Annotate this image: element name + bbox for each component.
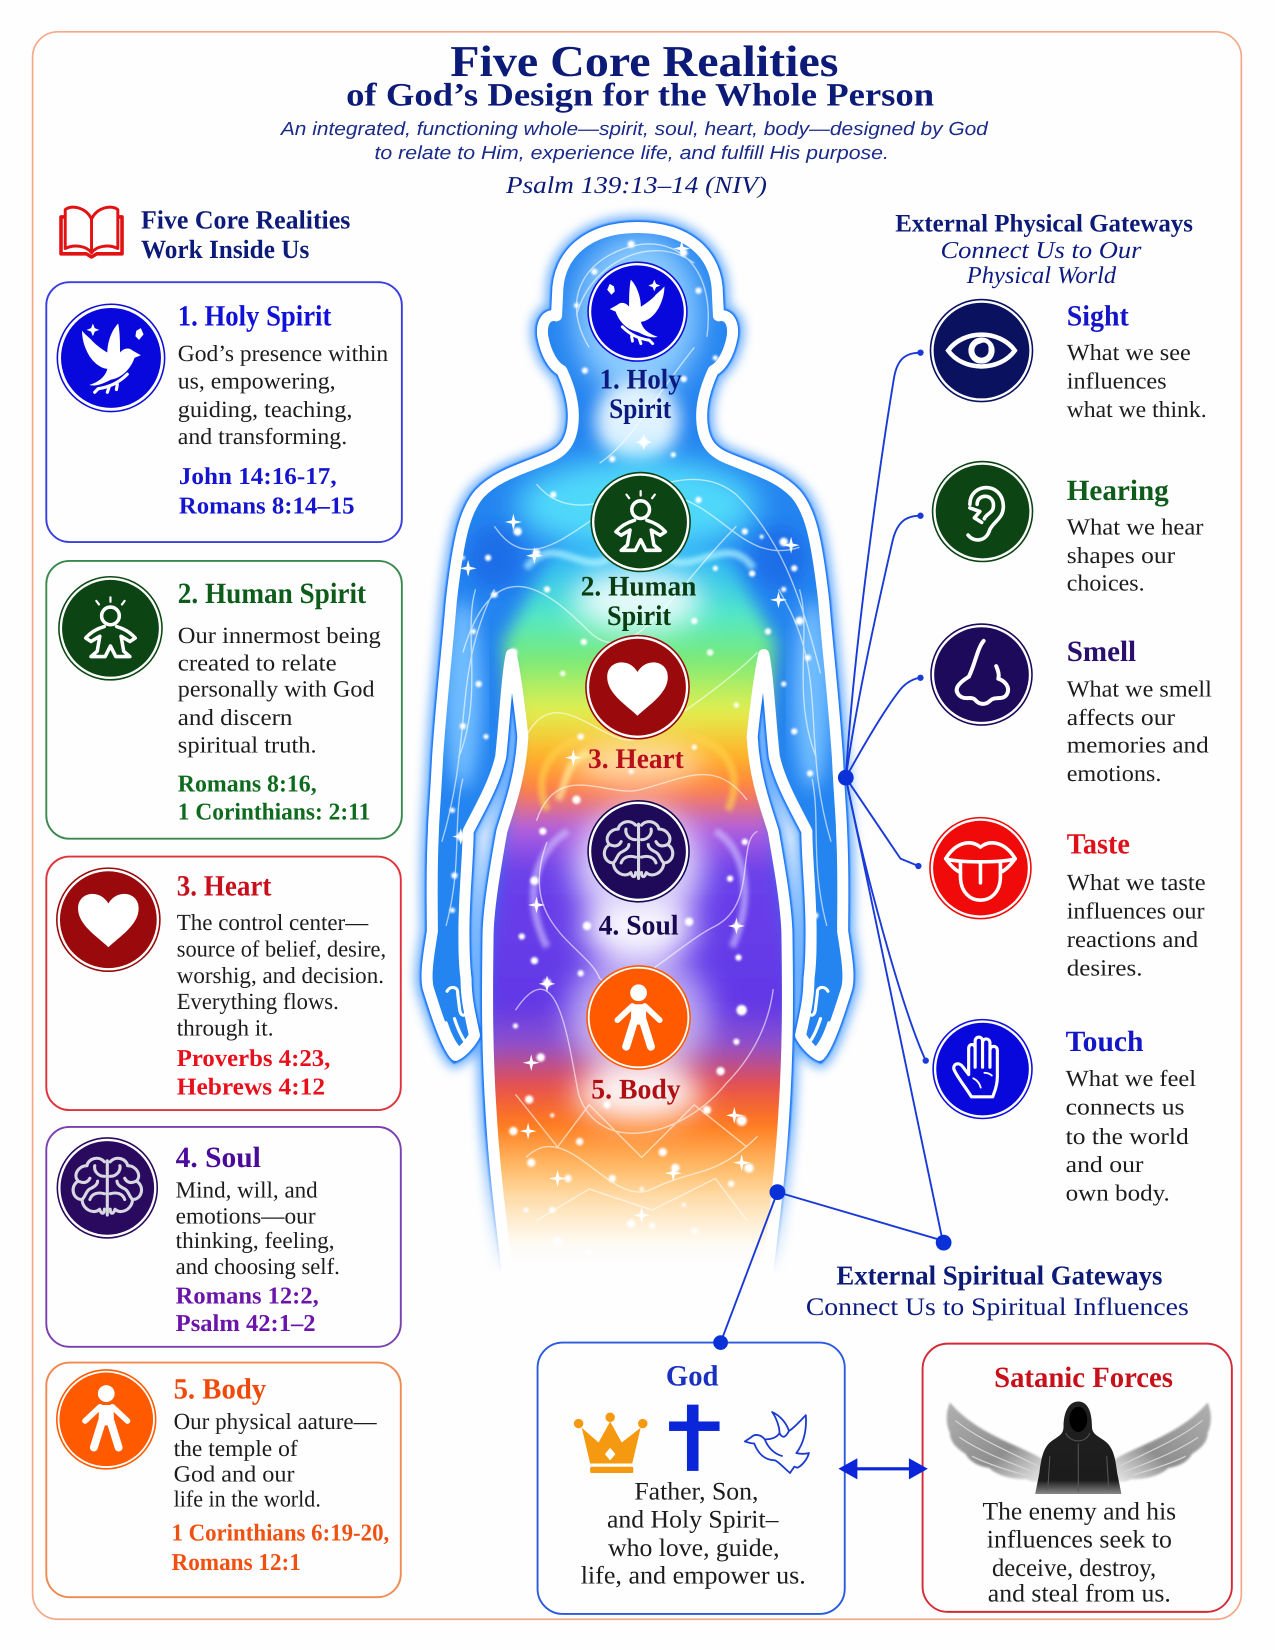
- label: Spirit: [609, 393, 671, 424]
- heading: Taste: [1067, 828, 1130, 861]
- subtitle: [280, 118, 989, 163]
- description: connects us: [1066, 1093, 1185, 1120]
- heading: 1. Holy Spirit: [178, 300, 332, 333]
- description: spiritual truth.: [178, 731, 317, 758]
- description: The enemy and his: [983, 1498, 1176, 1526]
- scripture references: [179, 463, 355, 519]
- description: influences our: [1067, 898, 1205, 924]
- icon: brain: [57, 1138, 157, 1238]
- label: 5. Body: [591, 1073, 681, 1105]
- icon: cross: [669, 1405, 720, 1471]
- title block: [280, 38, 989, 198]
- description: life in the world.: [174, 1486, 321, 1512]
- description: shapes our: [1067, 542, 1176, 568]
- description: [177, 909, 386, 1041]
- description: source of belief, desire,: [177, 935, 386, 962]
- human body figure: [400, 200, 884, 1294]
- hub: physical gateways: [838, 770, 854, 786]
- scripture references: Hebrews 4:12: [177, 1073, 325, 1100]
- scripture references: Proverbs 4:23,: [177, 1045, 330, 1071]
- heading: 2. Human Spirit: [178, 578, 367, 610]
- scripture references: [171, 1519, 389, 1575]
- spiritual gateways heading: Connect Us to Spiritual Influences: [806, 1294, 1189, 1322]
- panel: 2. Human Spirit: [46, 561, 402, 839]
- description: [178, 622, 381, 758]
- label: [600, 363, 682, 424]
- description: influences seek to: [987, 1527, 1172, 1554]
- spiritual gateways heading: External Spiritual Gateways: [836, 1261, 1162, 1291]
- icon: human spirit: [591, 473, 690, 571]
- description: what we think.: [1067, 396, 1207, 422]
- label: 2. Human: [581, 570, 696, 602]
- description: own body.: [1066, 1180, 1170, 1206]
- icon: hand: [933, 1020, 1032, 1119]
- spiritual gateways heading: [806, 1261, 1189, 1322]
- heading: Sight: [1067, 300, 1129, 333]
- description: Our innermost being: [178, 622, 381, 648]
- description: What we smell: [1067, 676, 1212, 702]
- scripture references: Romans 8:14–15: [179, 493, 355, 519]
- description: [176, 1176, 340, 1279]
- secondary title: of God’s Design for the Whole Person: [346, 76, 934, 113]
- description: thinking, feeling,: [176, 1227, 335, 1253]
- heading: God: [666, 1360, 719, 1393]
- description: Mind, will, and: [176, 1176, 318, 1203]
- scripture references: Psalm 42:1–2: [176, 1310, 316, 1336]
- description: [1067, 514, 1204, 596]
- icon: dove outline: [745, 1412, 809, 1473]
- subtitle: to relate to Him, experience life, and fulfill His purpose.: [375, 142, 889, 163]
- description: [1067, 869, 1206, 981]
- hub: God connection: [713, 1335, 728, 1350]
- arrow: God to Satanic Forces: [838, 1458, 928, 1479]
- description: worshig, and decision.: [177, 962, 384, 988]
- description: Our physical aature—: [174, 1408, 378, 1434]
- hub: spiritual gateways: [936, 1235, 952, 1251]
- description: Father, Son,: [634, 1478, 758, 1506]
- energy lines: [442, 244, 831, 1221]
- centre marker: 3. Heart: [586, 636, 689, 775]
- icon: human spirit: [59, 577, 162, 680]
- gateway: Smell: [931, 624, 1212, 786]
- description: and our: [1066, 1151, 1144, 1177]
- main title: Five Core Realities: [450, 38, 838, 87]
- description: and Holy Spirit–: [607, 1507, 780, 1534]
- description: memories and: [1067, 731, 1209, 758]
- panel: 3. Heart: [46, 857, 401, 1110]
- description: [1067, 339, 1207, 422]
- description: deceive, destroy,: [992, 1555, 1156, 1582]
- panel: 4. Soul: [46, 1127, 401, 1347]
- description: choices.: [1067, 569, 1145, 596]
- label: 1. Holy: [600, 363, 682, 395]
- centre marker: 1. Holy Spirit: [588, 262, 687, 424]
- icon: person: [57, 1370, 156, 1469]
- description: life, and empower us.: [581, 1562, 806, 1590]
- description: affects our: [1067, 704, 1176, 730]
- scripture references: [178, 770, 370, 825]
- description: What we see: [1067, 339, 1191, 365]
- gateway: Hearing: [933, 462, 1204, 596]
- description: What we taste: [1067, 869, 1206, 895]
- description: and discern: [178, 704, 292, 730]
- icon: open book: [61, 207, 122, 257]
- centre marker: 5. Body: [587, 966, 690, 1105]
- description: God’s presence within: [178, 340, 388, 366]
- glow halos behind icons: [567, 568, 710, 1122]
- panel: 5. Body: [46, 1363, 401, 1597]
- scripture references: Romans 12:2,: [176, 1283, 319, 1309]
- icon: dove: [588, 262, 687, 361]
- coloured swirls: [526, 547, 753, 947]
- description: the temple of: [174, 1435, 298, 1461]
- icon: crown: [574, 1413, 647, 1473]
- body white band: [427, 227, 848, 1278]
- gateway: Sight: [930, 300, 1207, 422]
- stars: [450, 241, 818, 1255]
- scripture references: [177, 1045, 330, 1100]
- scripture references: 1 Corinthians: 2:11: [178, 799, 370, 825]
- icon: brain: [588, 801, 689, 902]
- physical gateways heading: External Physical Gateways: [895, 211, 1193, 238]
- description: created to relate: [178, 649, 337, 676]
- physical gateways heading: [895, 211, 1193, 288]
- scripture references: 1 Corinthians 6:19-20,: [171, 1519, 389, 1546]
- description: us, empowering,: [178, 367, 336, 394]
- left column heading: Work Inside Us: [141, 236, 310, 264]
- heading: 4. Soul: [176, 1142, 261, 1174]
- label: [581, 570, 696, 631]
- body colour fill: [432, 233, 842, 1270]
- description: who love, guide,: [608, 1535, 780, 1562]
- left column heading: [141, 206, 351, 264]
- heading: Hearing: [1067, 475, 1169, 507]
- label: 4. Soul: [599, 909, 679, 941]
- physical gateways heading: Physical World: [966, 262, 1117, 288]
- icon: dove: [57, 304, 165, 412]
- icon: heart: [57, 868, 160, 971]
- description: Everything flows.: [177, 988, 339, 1014]
- centre marker: 4. Soul: [588, 801, 689, 941]
- icon: heart: [586, 636, 689, 739]
- description: [983, 1498, 1176, 1608]
- description: influences: [1067, 367, 1167, 394]
- description: and transforming.: [178, 423, 347, 449]
- panel: God: [538, 1343, 845, 1614]
- description: to the world: [1066, 1123, 1189, 1149]
- description: [1067, 676, 1212, 786]
- panel: Satanic Forces: [923, 1344, 1232, 1612]
- description: guiding, teaching,: [178, 396, 352, 422]
- description: and choosing self.: [176, 1253, 340, 1279]
- description: through it.: [177, 1014, 274, 1041]
- description: emotions.: [1067, 760, 1161, 786]
- icon: lips and tongue: [930, 818, 1031, 919]
- description: emotions—our: [176, 1203, 316, 1229]
- icon: nose: [931, 624, 1032, 725]
- body glow outline: [427, 227, 848, 1278]
- description: [1066, 1065, 1196, 1206]
- heading: 3. Heart: [177, 870, 272, 903]
- description: [174, 1408, 378, 1512]
- scripture references: Romans 12:1: [171, 1549, 301, 1575]
- gateway: Touch: [933, 1020, 1196, 1206]
- description: and steal from us.: [988, 1580, 1171, 1608]
- heading: 5. Body: [174, 1373, 266, 1406]
- left column heading: Five Core Realities: [141, 206, 351, 235]
- icon: person: [587, 966, 690, 1069]
- physical gateways heading: Connect Us to Our: [940, 237, 1143, 263]
- hub: body connection: [770, 1184, 785, 1200]
- scripture references: [176, 1283, 319, 1336]
- connector lines from hub: [721, 350, 943, 1343]
- description: What we hear: [1067, 514, 1204, 540]
- icon: eye: [930, 300, 1033, 402]
- scripture references: Romans 8:16,: [178, 770, 317, 797]
- label: Spirit: [607, 600, 671, 631]
- description: The control center—: [177, 909, 369, 935]
- centre marker: 2. Human Spirit: [581, 473, 696, 631]
- description: desires.: [1067, 954, 1142, 981]
- sparkles: [452, 240, 808, 1224]
- description: reactions and: [1067, 926, 1198, 952]
- heading: Satanic Forces: [994, 1362, 1173, 1394]
- subtitle: An integrated, functioning whole—spirit, soul, heart, body—designed by God: [280, 118, 989, 139]
- description: [178, 340, 388, 449]
- description: [581, 1478, 806, 1590]
- heading: Touch: [1066, 1026, 1144, 1059]
- heading: Smell: [1067, 636, 1136, 668]
- scripture reference: Psalm 139:13–14 (NIV): [505, 172, 767, 198]
- gateway: Taste: [930, 818, 1206, 981]
- label: 3. Heart: [588, 743, 684, 775]
- description: God and our: [174, 1460, 295, 1487]
- description: What we feel: [1066, 1065, 1196, 1091]
- icon: hooded winged figure: [947, 1401, 1211, 1494]
- description: personally with God: [178, 676, 375, 702]
- panel: 1. Holy Spirit: [46, 282, 402, 542]
- icon: ear: [933, 462, 1033, 561]
- scripture references: John 14:16-17,: [179, 463, 337, 489]
